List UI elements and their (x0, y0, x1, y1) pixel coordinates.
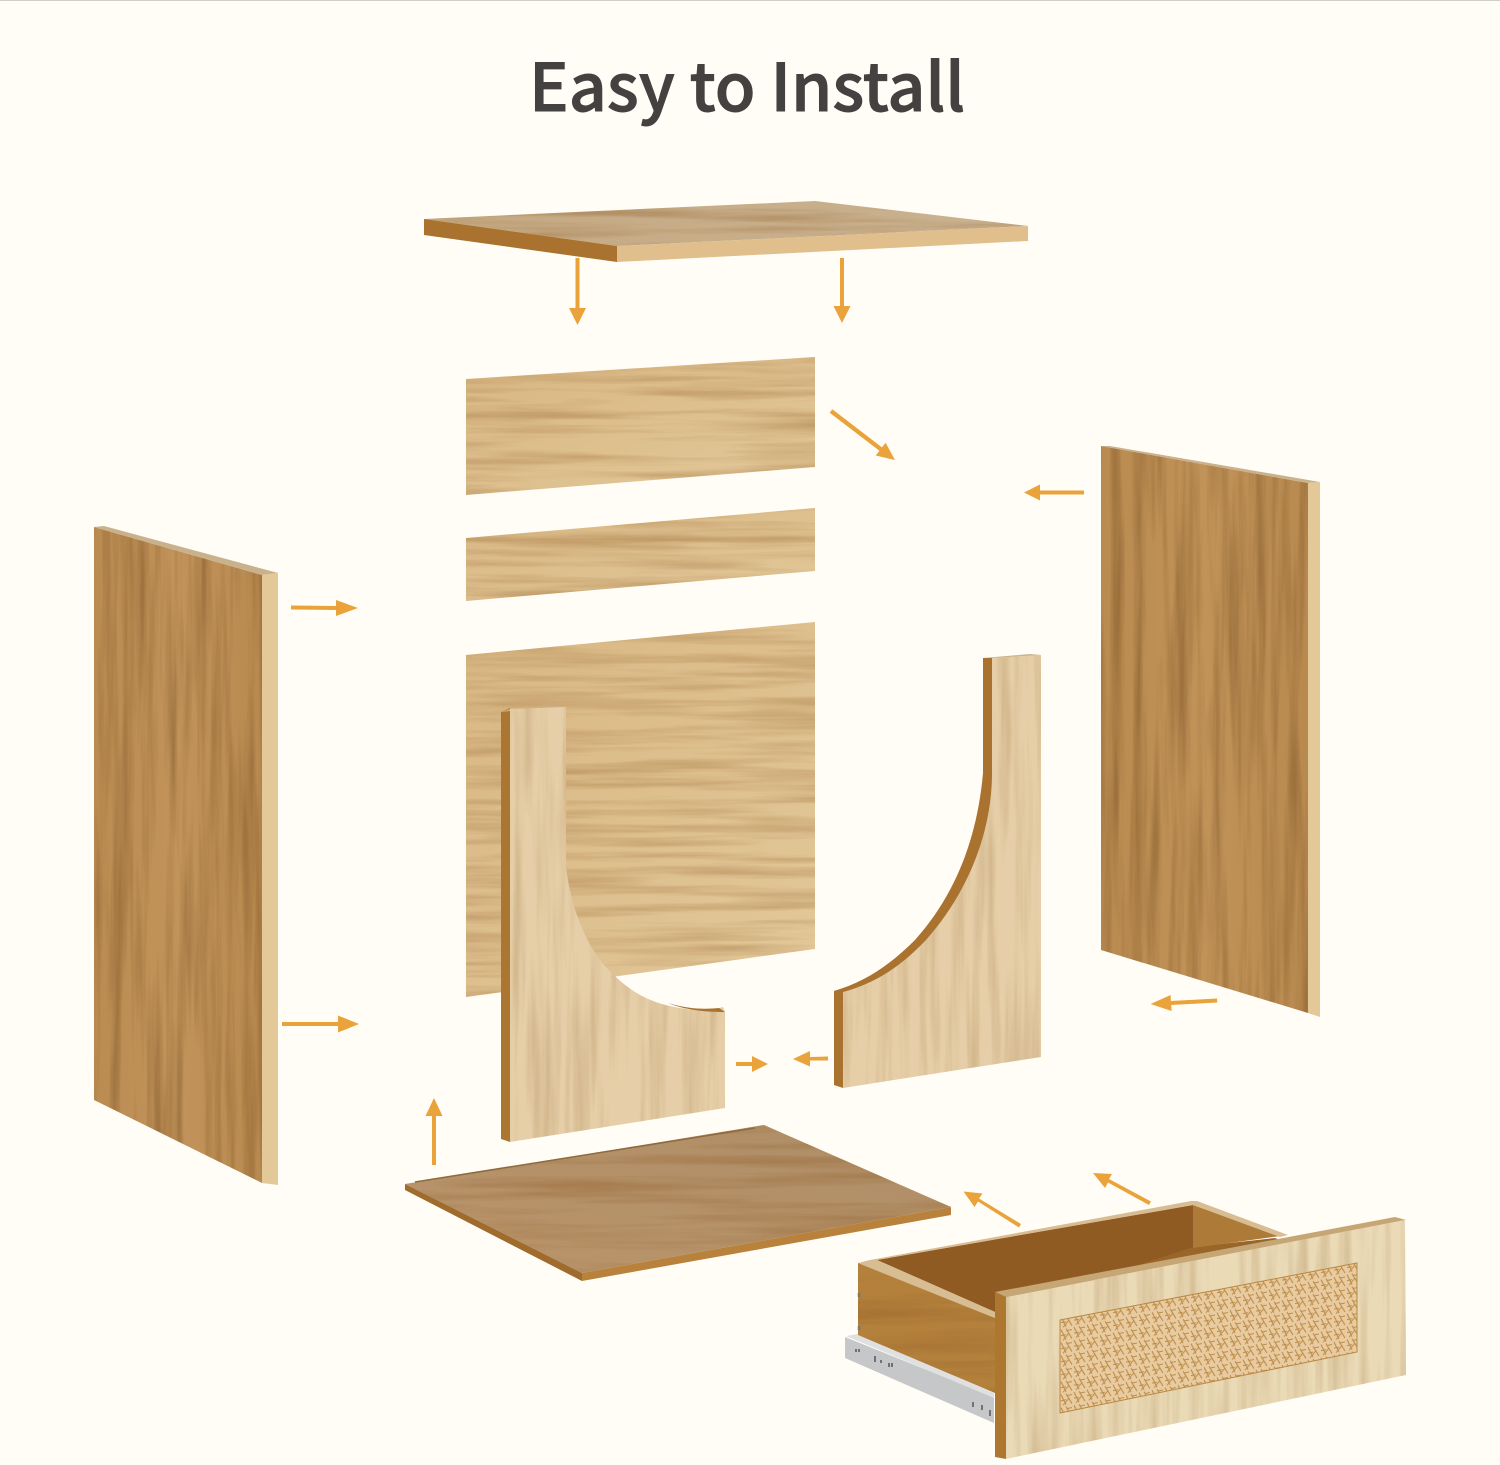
drawer front face (1006, 1220, 1406, 1459)
drawer inside right wall (1193, 1205, 1280, 1248)
panel: left side board (94, 526, 278, 1185)
arrow: drawer back left (1093, 1173, 1151, 1205)
title: Easy to Install (529, 35, 965, 131)
drawer front top edge (995, 1217, 1406, 1297)
arrow: drawer front left (964, 1192, 1021, 1228)
drawer (845, 1201, 1406, 1459)
drawer slide rail (845, 1334, 994, 1423)
panel: upper back board (466, 357, 815, 495)
drawer front left edge (995, 1292, 1006, 1459)
panel: right curved leg (834, 654, 1041, 1088)
arrow: left side board upper inward (291, 600, 358, 616)
panel: middle back rail (466, 508, 815, 601)
arrow: top board left down (569, 258, 586, 325)
arrow: right side board inward (1024, 484, 1084, 500)
arrow: left leg inward (736, 1056, 768, 1072)
arrow: back board to right (830, 409, 895, 460)
arrow: left side board lower inward (282, 1016, 359, 1032)
drawer inside back wall (877, 1205, 1193, 1312)
panel: large back board (466, 622, 815, 997)
drawer screws (858, 1293, 860, 1330)
panel: left curved leg (501, 706, 725, 1142)
drawer left side (858, 1263, 995, 1393)
panel: top board (424, 201, 1028, 262)
arrows (282, 258, 1217, 1228)
panel: bottom board (405, 1125, 951, 1281)
arrow: top board right down (834, 258, 850, 323)
arrow: right leg inward (793, 1051, 828, 1066)
drawer rim (858, 1201, 1288, 1318)
arrow: bottom board upward (426, 1098, 442, 1165)
arrow: right side board lower inward (1151, 995, 1217, 1011)
cane webbing panel (1060, 1263, 1357, 1413)
panel: right side board (1101, 446, 1320, 1017)
drawer inside floor strip (995, 1238, 1282, 1312)
